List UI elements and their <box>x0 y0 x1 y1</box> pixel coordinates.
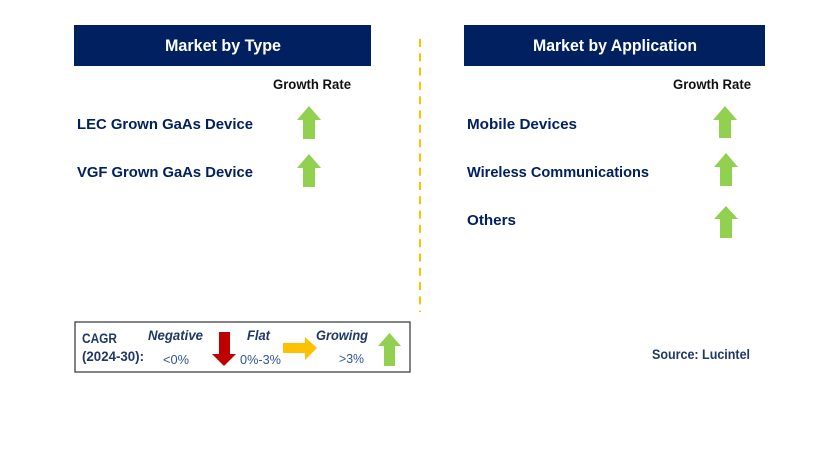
label: others: Others <box>467 213 516 229</box>
label: wireless communications: Wireless Communications <box>467 165 649 181</box>
icon: up arrow others <box>714 206 738 238</box>
column label: growth rate: Growth Rate <box>673 77 751 92</box>
icon: up arrow VGF <box>297 154 321 187</box>
legend: CAGR <box>75 322 410 372</box>
icon: up arrow wireless communications <box>714 153 738 186</box>
column label: growth rate: Growth Rate <box>273 77 351 92</box>
legend: negative: <0% <box>163 352 189 367</box>
legend title: (2024-30): <box>82 349 144 364</box>
label: VGF Grown GaAs Device: VGF Grown GaAs Device <box>77 165 253 181</box>
legend title: CAGR <box>82 331 117 346</box>
label: mobile devices: Mobile Devices <box>467 117 577 133</box>
heading: market by type <box>74 25 371 66</box>
icon: down arrow <box>212 332 236 366</box>
icon: up arrow <box>378 333 401 366</box>
heading: market by type: Market by Type <box>165 37 281 55</box>
heading: market by application: Market by Application <box>533 37 697 55</box>
legend: growing <box>316 328 401 366</box>
legend: flat <box>240 328 317 367</box>
icon: up arrow LEC <box>297 106 321 139</box>
legend: flat: 0%-3% <box>240 352 281 367</box>
label: LEC Grown GaAs Device: LEC Grown GaAs Device <box>77 117 253 133</box>
icon: up arrow mobile devices <box>713 106 737 138</box>
panel: market by application <box>464 25 765 238</box>
source note: Source: Lucintel <box>652 347 750 362</box>
legend: negative: Negative <box>148 328 203 343</box>
legend: growing: Growing <box>316 328 369 343</box>
panel: market by type <box>74 25 371 187</box>
legend title <box>82 331 144 364</box>
icon: right arrow <box>283 337 317 360</box>
heading: market by application <box>464 25 765 66</box>
legend: flat: Flat <box>247 328 270 343</box>
legend: negative <box>148 328 236 367</box>
legend: growing: >3% <box>339 351 364 366</box>
